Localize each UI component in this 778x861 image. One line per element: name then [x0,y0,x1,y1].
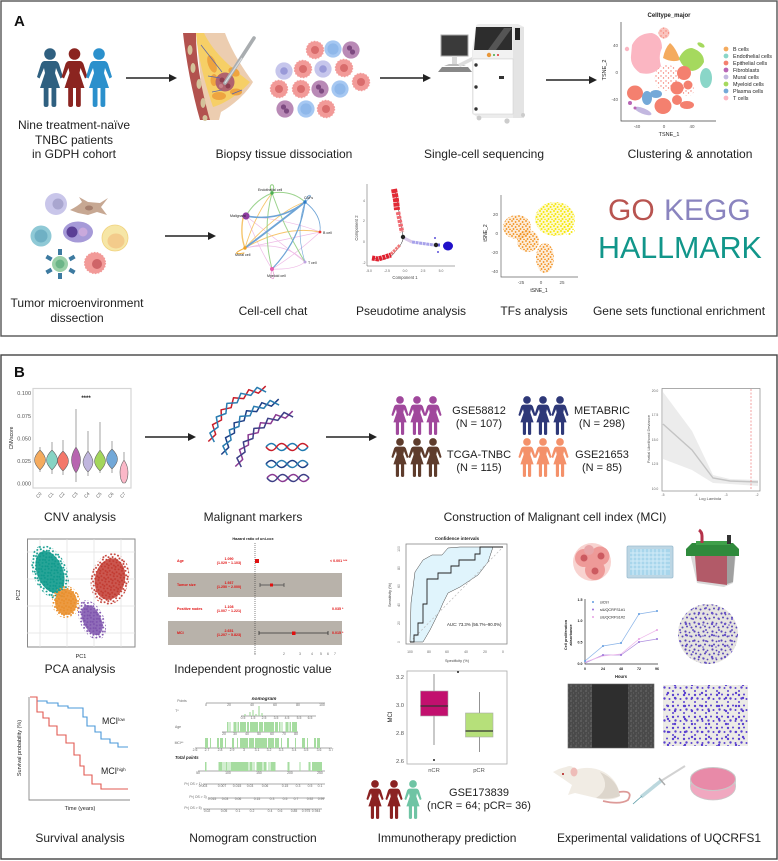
chart: nomogram: 50 [257,732,261,736]
arrow [126,74,177,82]
chart: pseudotime trajectory: 2.5 [421,269,425,273]
chart: cell-cell chat network: B cell [323,231,332,235]
icon: breast biopsy [183,33,254,121]
chart: forest plot: 2 [283,652,285,656]
legend: cell types [724,47,772,102]
chart: forest plot: Hazard ratio of uni-cox [232,537,274,541]
chart: nomogram: nomogram [252,696,277,702]
chart: nomogram: 0.5 [308,784,312,788]
cohort TCGA-TNBC text: TCGA-TNBC [447,449,511,461]
legend: cell types: Plasma cells [733,89,764,95]
chart: nomogram: 100 [225,771,231,775]
legend: cell types: Endothelial cells [733,54,772,60]
chart: ROC curve: Specificity (%) [445,659,470,663]
chart: lasso deviance: -5 [661,493,665,497]
chart: nomogram: 0.2 [250,809,254,813]
chart: PCA scatter [16,539,135,660]
arrow [326,433,377,441]
immunotherapy caption: Immunotherapy prediction [378,831,516,845]
chart: lasso deviance [646,388,760,501]
panel: B validation [1,355,777,859]
malignant markers caption: Malignant markers [204,510,302,524]
chart: forest plot: < 0.001 *** [330,559,348,563]
chart: cell-cell chat network: CAFs [304,196,313,200]
biopsy caption: Biopsy tissue dissociation [216,147,352,161]
chart: ROC curve: 0 [502,650,504,654]
chart: nomogram: 3.1 [255,748,259,752]
chart: nomogram: 150 [256,771,262,775]
chart: MCI boxplot: pCR [473,768,485,774]
chart: survival curves: high [117,767,126,772]
chart: nomogram: 5.5 [297,716,301,720]
legend: cell types: Myeloid cells [733,82,764,88]
chart: MCI boxplot: 3.2 [396,675,404,681]
chart: CNV violins: 0.000 [17,482,31,488]
chart: pseudotime trajectory [354,184,455,280]
chart: nomogram: 0.06 [235,797,241,801]
chart: CNV violins: C5 [95,491,103,499]
chart: cell-cell chat network: T cell [308,261,317,265]
chart: lasso deviance: Log Lambda [699,496,722,501]
image: wound healing [568,684,654,748]
chart: nomogram: 0.3 [270,797,274,801]
chart: tSNE cell types: -40 [634,124,641,129]
chart: CNV violins: C1 [47,491,55,499]
chart: tSNE cell types: TSNE_2 [602,60,608,80]
chart: cell proliferation: 72 [637,667,641,671]
chart: ROC curve: Confidence intervals [435,536,480,541]
patient cohort caption: in GDPH cohort [32,147,117,161]
nomogram caption: Nomogram construction [189,831,317,845]
chart: nomogram: Total points [175,755,199,760]
chart: cell proliferation: 0.5 [578,640,582,644]
arrow [145,433,196,441]
chart: MCI boxplot: nCR [428,768,440,774]
chart: nomogram: 0.6 [278,809,282,813]
chart: lasso deviance: -2 [755,493,759,497]
chart: nomogram: 0.975 [302,809,310,813]
chart: nomogram: 40 [245,732,249,736]
chart: forest plot: 1 [254,652,256,656]
chart: forest plot: Tumor size [177,583,196,587]
chart: MCI boxplot [388,671,507,774]
chart: forest plot: 7 [334,652,336,656]
chart: tSNE cell types [602,13,772,138]
chart: nomogram: 0.15 [282,784,288,788]
chart: CNV violins: **** [81,396,91,402]
chart: nomogram: 4.5 [285,716,289,720]
chart: nomogram: 70 [282,732,286,736]
chart: forest plot: (1.250 ~ 2.000) [217,585,242,589]
chart: cell proliferation: 0.0 [578,662,582,666]
chart: ROC curve: AUC: 73.3% (56.7%–90.0%) [447,622,502,627]
chart: nomogram: 2.5 [262,716,266,720]
chart: lasso deviance: -3 [724,493,728,497]
cohort GSE21653 text: (N = 85) [582,462,622,474]
chart: nomogram: 0.015 [208,797,216,801]
cohort METABRIC text: (N = 298) [579,418,625,430]
chart: nomogram: 0.5 [283,797,287,801]
legend: cell types: B cells [733,47,749,53]
survival caption: Survival analysis [35,831,125,845]
chart: ROC curve: 100 [407,650,413,654]
chart: pseudotime trajectory: -5.0 [366,269,372,273]
chart: nomogram: 0.4 [268,809,272,813]
chart: nomogram: 0.7 [294,797,298,801]
chart: nomogram: 200 [287,771,293,775]
chart: nomogram: 50 [196,771,200,775]
chart: cell proliferation: siUQCRFS1#1 [600,608,625,612]
chart: TF tSNE [483,195,578,294]
chart: lasso deviance: 20.0 [652,389,658,393]
icon: sequencer [438,24,525,124]
chart: survival curves: low [118,717,126,722]
chart: nomogram: Pr( OS > 5) [184,806,202,810]
chart: nomogram: 1.5 [251,716,255,720]
cohort METABRIC [518,396,569,435]
chart: survival curves: MCI [101,766,117,776]
icon: well plate [627,546,673,578]
patient cohort caption: Nine treatment-naïve [18,118,130,132]
chart: nomogram: 20 [227,703,231,707]
chart: nomogram: 0.05 [221,809,227,813]
chart: nomogram: 3.3 [279,748,283,752]
chart: nomogram: 3.2 [267,748,271,752]
chart: survival curves: MCI [102,716,118,726]
chart: nomogram: 30 [233,732,237,736]
chart: forest plot: (1.207 ~ 5.823) [217,633,242,637]
chart: nomogram: Points [177,699,187,703]
chart: nomogram: 3.7 [329,748,333,752]
chart: tSNE cell types: Celltype_major [647,13,691,19]
chart: cell-cell chat network [230,185,332,279]
PCA caption: PCA analysis [45,662,115,676]
chart: cell proliferation: 0 [584,667,586,671]
cohort GSE173839 text: GSE173839 [449,787,509,799]
chart: nomogram: 0.3 [296,784,300,788]
chart: nomogram: 2.7 [205,748,209,752]
panel letter B: B [14,364,25,381]
icon: electrophoresis tank [686,530,739,587]
cohort GSE21653 text: GSE21653 [575,449,629,461]
MCI caption: Construction of Malignant cell index (MCI) [444,510,666,524]
CNV caption: CNV analysis [44,510,116,524]
chart: cell proliferation: Cell proliferation [564,619,568,650]
chart: TF tSNE: -25 [518,280,525,285]
chart: cell proliferation: siCtrl [600,600,609,604]
chart: tSNE cell types: TSNE_1 [659,132,679,138]
chart: nomogram: 80 [294,732,298,736]
chart: TF tSNE: tSNE_1 [530,288,548,294]
chart: forest plot: 1.108 [224,605,234,609]
chart: tSNE cell types: 0 [663,124,666,129]
chart: nomogram: 40 [250,703,254,707]
chart: CNV violins: C3 [71,491,79,499]
icon: DNA helices [208,386,309,482]
chart: lasso deviance: 15.0 [652,438,658,442]
chart: TF tSNE: 25 [559,280,565,285]
cohort GSE173839 [366,780,422,819]
chart: cell proliferation: Hours [615,674,628,679]
chart: nomogram: 3.4 [292,748,296,752]
chart: lasso deviance: -4 [694,493,698,497]
chart: ROC curve: Sensitivity (%) [388,582,392,607]
chart: nomogram: Age [175,725,181,729]
forest caption: Independent prognostic value [174,662,332,676]
icon: culture dish [690,768,736,800]
chart: nomogram: 0.003 [199,784,207,788]
chart: cell proliferation: siUQCRFS1#2 [600,616,625,620]
chart: tSNE cell types: 0 [615,70,618,75]
chart: CNV violins: C2 [58,491,66,499]
legend: cell types: Mural cells [733,75,759,81]
icon: cell cluster [573,543,611,581]
chart: nomogram: 0.02 [204,809,210,813]
enrichment caption: Gene sets functional enrichment [593,304,766,318]
chart: cell proliferation: 96 [655,667,659,671]
chart: PCA scatter: PC1 [76,654,86,660]
chart: nomogram: 100 [319,703,325,707]
gene set names [598,194,762,265]
chart: nomogram: T* [175,709,179,713]
chart: nomogram: 0.99 [318,797,324,801]
legend: cell types: Epithelial cells [733,61,767,67]
chart: CNV violins: C6 [107,491,115,499]
panel: A workflow [1,1,777,336]
cohort GSE58812 text: GSE58812 [452,405,506,417]
image: transwell migration [663,685,748,746]
chart: nomogram: 0.015 [233,784,241,788]
chart: forest plot: (1.029 ~ 1.103) [217,561,242,565]
chart: forest plot: 0.015 * [332,631,344,635]
chart: nomogram: 0.06 [262,784,268,788]
chart: CNV violins: C7 [119,491,127,499]
chart: cell-cell chat network: Mural cell [235,253,251,257]
chart: nomogram: 0.03 [222,797,228,801]
chart: pseudotime trajectory: -2.5 [384,269,390,273]
chart: MCI boxplot: MCI [388,711,394,722]
chart: tSNE cell types: 40 [689,124,695,129]
chat caption: Cell-cell chat [239,304,308,318]
icon: syringe [633,766,685,804]
chart: pseudotime trajectory: 5.0 [439,269,443,273]
chart: forest plot: Age [177,559,184,563]
chart: CNV violins [9,388,131,499]
cohort METABRIC text: METABRIC [574,405,630,417]
chart: nomogram: 0.92 [307,797,313,801]
arrow [165,232,216,240]
chart: ROC curve: 80 [397,566,401,570]
chart: CNV violins: C4 [83,491,91,499]
chart: ROC curve: 20 [483,650,487,654]
chart: CNV violins: 0.050 [17,436,31,442]
chart: nomogram: 80 [296,703,300,707]
chart: nomogram [175,696,333,813]
chart: ROC curve: 0 [397,641,401,643]
chart: forest plot: 1.090 [224,557,234,561]
chart: nomogram: 3.6 [317,748,321,752]
chart: nomogram: 0.03 [247,784,253,788]
chart: ROC curve: 80 [427,650,431,654]
arrow [380,74,431,82]
chart: nomogram: Pr( OS > 3) [189,795,207,799]
panel letter A: A [14,13,25,30]
chart: survival curves: Survival probability (%) [17,720,23,776]
cohort GSE58812 text: (N = 107) [456,418,502,430]
chart: lasso deviance: 12.5 [652,462,658,466]
chart: CNV violins: C0 [35,491,43,499]
legend: cell types: T cells [733,96,749,102]
chart: cell-cell chat network: Myeloid cell [267,274,286,278]
chart: ROC curve: 100 [397,546,401,552]
chart: MCI boxplot: 2.8 [396,731,404,737]
chart: nomogram: 0.944 [312,809,320,813]
icon: mouse [553,766,630,803]
chart: TF tSNE: -40 [491,269,498,274]
chart: cell proliferation: absorbance [569,624,573,646]
chart: MCI boxplot: 2.6 [396,759,404,765]
chart: forest plot: 0.035 * [332,607,344,611]
chart: pseudotime trajectory: 0.0 [403,269,407,273]
chart: nomogram: 3.5 [274,716,278,720]
chart: TF tSNE: tSNE_2 [483,224,489,242]
validation caption: Experimental validations of UQCRFS1 [557,831,761,845]
cohort GSE58812 [391,396,442,435]
chart: lasso deviance: 17.5 [652,413,658,417]
chart: nomogram: 60 [273,703,277,707]
chart: tSNE cell types: 40 [613,43,618,48]
chart: pseudotime trajectory: 4 [363,199,365,203]
cohort TCGA-TNBC [391,438,442,477]
chart: TF tSNE: -20 [491,250,498,255]
chart: forest plot: Positive nodes [177,607,202,611]
cohort TCGA-TNBC text: (N = 115) [456,462,502,474]
chart: pseudotime trajectory: Component 2 [354,215,359,241]
chart: forest plot: MCI [177,631,184,635]
chart: forest plot: 4 [311,652,313,656]
chart: pseudotime trajectory: 0 [363,240,365,244]
chart: nomogram: 0.15 [254,797,260,801]
chart: survival curves [17,697,130,812]
icon: three patients [37,48,112,107]
chart: nomogram: 3 [243,748,245,752]
chart: forest plot: 5 [320,652,322,656]
chart: nomogram: 0.85 [291,809,297,813]
chart: nomogram: 250 [317,771,323,775]
chart: ROC curve: 60 [445,650,449,654]
gene set names: KEGG [664,194,751,227]
chart: nomogram: 2.6 [193,748,197,752]
cohort GSE173839 text: (nCR = 64; pCR= 36) [427,800,531,812]
legend: cell types: Fibroblasts [733,68,760,74]
chart: TF tSNE: 0 [495,231,498,236]
pseudotime caption: Pseudotime analysis [356,304,466,318]
chart: cell proliferation [564,598,659,679]
gene set names: GO [608,194,655,227]
chart: lasso deviance: Partial Likelihood Deviance [646,414,651,463]
chart: nomogram: 0.5 [241,716,245,720]
chart: pseudotime trajectory: Component 1 [392,275,418,280]
chart: nomogram: 60 [270,732,274,736]
chart: nomogram: 0 [205,703,207,707]
TFs caption: TFs analysis [500,304,568,318]
chart: ROC curve: 60 [397,584,401,588]
cohort GSE21653 [518,438,569,477]
chart: forest plot: 6 [327,652,329,656]
chart: nomogram: MCI** [175,741,184,745]
chart: ROC curve: 40 [397,603,401,607]
chart: nomogram: 3.5 [304,748,308,752]
chart: forest plot: 3 [299,652,301,656]
clustering caption: Clustering & annotation [628,147,752,161]
chart: cell proliferation: 1.5 [578,598,582,602]
chart: ROC curve [388,536,507,663]
chart: nomogram: 0.007 [218,784,226,788]
chart: nomogram: 2.9 [230,748,234,752]
chart: cell proliferation: 24 [601,667,605,671]
microenvironment caption: dissection [50,311,104,325]
chart: nomogram: 0.1 [318,784,322,788]
microenvironment caption: Tumor microenvironment [11,296,144,310]
chart: TF tSNE: 0 [540,280,543,285]
chart: forest plot [168,537,348,656]
chart: forest plot: 1.937 [224,581,234,585]
gene set names: HALLMARK [598,231,762,265]
chart: nomogram: 0.1 [236,809,240,813]
chart: cell-cell chat network: Malignant [230,214,246,218]
chart: cell proliferation: 1.0 [578,619,582,623]
chart: nomogram: 20 [222,732,226,736]
chart: CNV violins: 0.075 [17,414,31,420]
chart: TF tSNE: 20 [493,212,498,217]
icon: tumor microenvironment cells [30,193,128,279]
chart: pseudotime trajectory: 2 [363,219,365,223]
patient cohort caption: TNBC patients [35,133,113,147]
chart: MCI boxplot: 3.0 [396,703,404,709]
chart: tSNE cell types: -40 [611,97,618,102]
chart: lasso deviance: 10.0 [652,487,658,491]
sequencing caption: Single-cell sequencing [424,147,544,161]
image: colony dish [678,604,738,664]
icon: dissociated cells [270,40,370,118]
chart: CNV violins: 0.025 [17,459,31,465]
chart: forest plot: 2.651 [224,629,234,633]
chart: pseudotime trajectory: -2 [362,261,366,265]
arrow [546,76,597,84]
chart: nomogram: 6.5 [308,716,312,720]
chart: PCA scatter: PC2 [16,590,22,600]
chart: forest plot: (1.007 ~ 1.221) [217,609,242,613]
chart: nomogram: 2.8 [218,748,222,752]
chart: nomogram: Pr( OS > 1) [184,782,202,786]
chart: CNV violins: CNVscore [9,426,15,449]
chart: CNV violins: 0.100 [17,391,31,397]
chart: ROC curve: 40 [464,650,468,654]
chart: survival curves: Time (years) [65,806,95,812]
chart: ROC curve: 20 [397,621,401,625]
chart: cell proliferation: 48 [619,667,623,671]
chart: cell-cell chat network: Endothelial cell [258,188,282,192]
